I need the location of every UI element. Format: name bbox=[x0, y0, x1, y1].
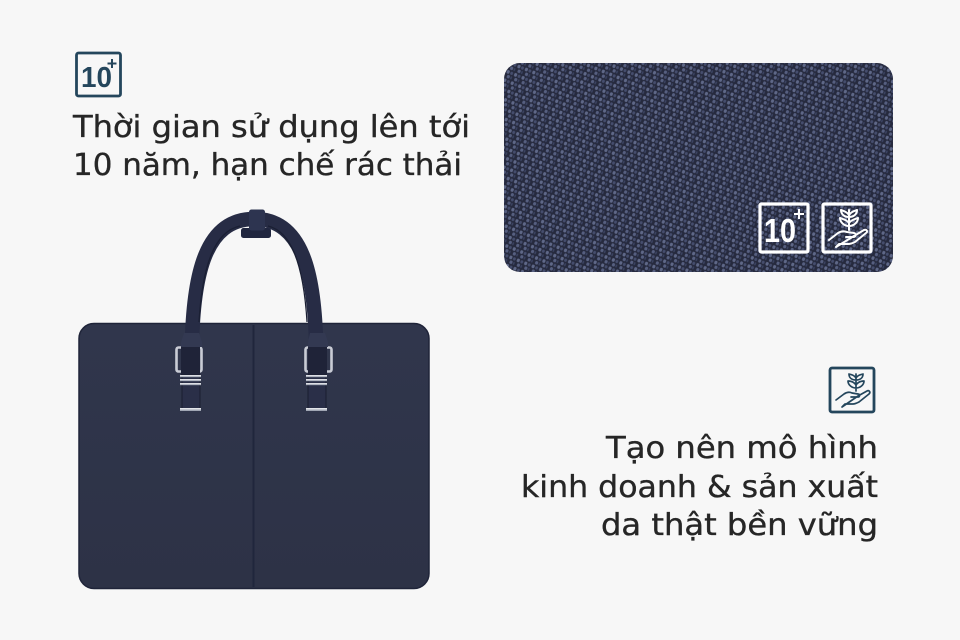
handle keeper tab bbox=[249, 210, 265, 230]
heading: sustainable business model: kinh doanh & sản xuất bbox=[521, 470, 878, 505]
product: navy leather briefcase bbox=[79, 210, 429, 588]
heading: sustainable business model: Tạo nên mô hình bbox=[605, 431, 878, 466]
briefcase body bbox=[79, 324, 429, 588]
left buckle bbox=[176, 333, 202, 411]
icon: 10+ years white: 10 bbox=[764, 212, 796, 249]
icon: sustainable plant in hand white bbox=[823, 204, 871, 252]
panel: leather texture swatch bbox=[504, 63, 893, 272]
right buckle bbox=[306, 333, 332, 411]
heading: product lifetime bbox=[72, 110, 470, 183]
handle keeper base bbox=[241, 228, 271, 238]
heading: product lifetime: Thời gian sử dụng lên tới bbox=[72, 110, 470, 145]
icon: 10+ years bbox=[76, 53, 120, 96]
icon: sustainable plant in hand bbox=[830, 368, 874, 412]
heading: product lifetime: 10 năm, hạn chế rác thải bbox=[73, 148, 462, 183]
icon: 10+ years: 10 bbox=[81, 62, 112, 94]
briefcase handle bbox=[192, 219, 316, 340]
heading: sustainable business model bbox=[521, 431, 878, 543]
heading: sustainable business model: da thật bền vững bbox=[601, 508, 878, 543]
icon: 10+ years white bbox=[760, 204, 808, 252]
centre seam bbox=[252, 325, 254, 587]
